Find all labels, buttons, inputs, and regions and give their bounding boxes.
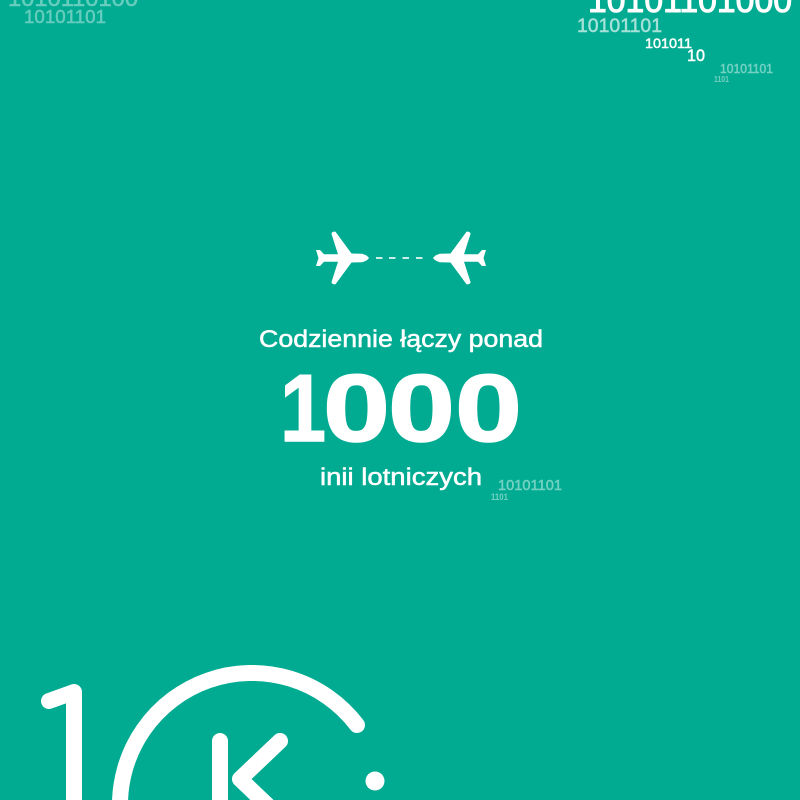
binary digits: centre [491, 477, 562, 502]
big number: 0 [323, 355, 390, 462]
binary digits: top right: 101011 [645, 35, 692, 51]
binary digits: top right: 10101101 [577, 16, 662, 37]
logo: digit one [49, 692, 74, 800]
binary digits: top right: 10 [687, 47, 705, 65]
binary digits: top right: 10101101 [720, 62, 773, 76]
big number: 1 [280, 355, 326, 462]
big number: 0 [388, 355, 455, 462]
logo: dot [366, 772, 384, 790]
binary digits: top right [577, 0, 792, 84]
binary digits: centre: 10101101 [498, 477, 562, 494]
big number: 0 [455, 355, 522, 462]
icon: dashed connector [376, 257, 422, 259]
binary digits: centre: 1101 [491, 492, 508, 502]
heading: intro line: Codziennie łączy ponad [259, 326, 543, 353]
binary digits: top left: 10101101 [24, 7, 106, 27]
big number [280, 355, 522, 462]
logo: 10k anniversary mark [49, 673, 384, 800]
text: closing line: inii lotniczych [320, 464, 482, 491]
logo: open circle [120, 673, 357, 800]
icon: left plane [316, 232, 369, 284]
binary digits: top right: 1101 [714, 74, 729, 84]
icon: two planes joined by a dashed line [316, 232, 486, 284]
binary digits: top left [8, 0, 138, 27]
icon: right plane [433, 232, 486, 284]
logo: letter k [220, 741, 285, 800]
